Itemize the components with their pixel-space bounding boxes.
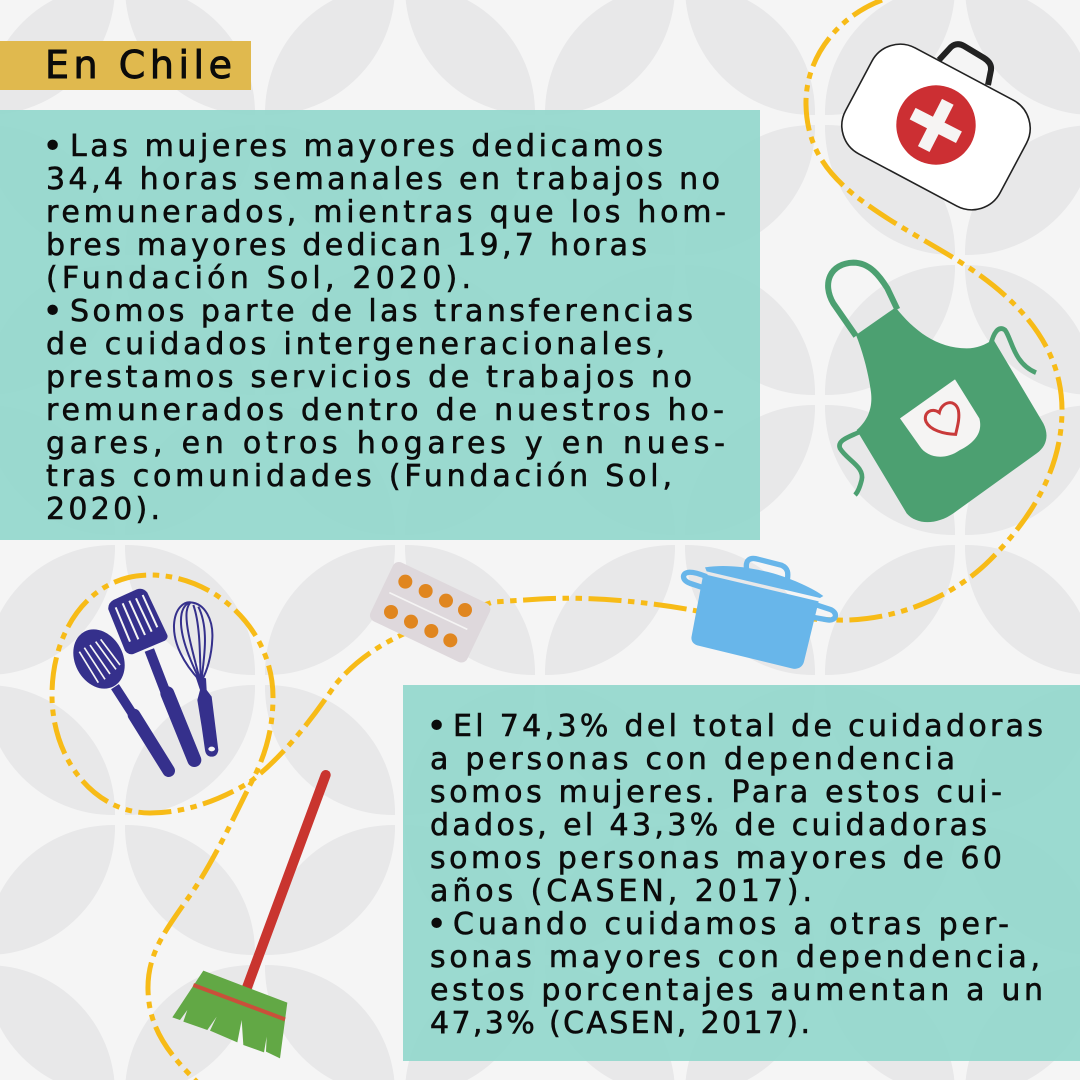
panel: lower text: somos mujeres. Para estos cui-	[430, 775, 1002, 810]
panel: upper text: bres mayores dedican 19,7 horas	[46, 228, 647, 263]
panel: lower text	[403, 685, 1080, 1061]
panel: upper text: •	[42, 126, 63, 167]
panel: lower text: •	[426, 706, 447, 747]
icon: cooking pot	[684, 558, 835, 669]
icon: apron	[828, 263, 1047, 522]
panel: upper text	[0, 110, 760, 540]
icon: whisk	[174, 602, 218, 757]
panel: upper text: (Fundación Sol, 2020).	[46, 261, 471, 296]
panel: lower text: •	[426, 904, 447, 945]
icon: kitchen utensils	[63, 589, 218, 771]
panel: upper text: •	[42, 291, 63, 332]
panel: lower text: años (CASEN, 2017).	[430, 874, 812, 909]
panel: upper text: de cuidados intergeneracionales,	[46, 327, 665, 362]
icon: slotted spoon	[63, 620, 169, 771]
panel: lower text: a personas con dependencia	[430, 742, 955, 777]
panel: upper text: 34,4 horas semanales en trabajos no	[46, 162, 720, 197]
panel: upper text: remunerados, mientras que los hom-	[46, 195, 726, 230]
panel: upper text: prestamos servicios de trabajos no	[46, 360, 692, 395]
panel: upper text: tras comunidades (Fundación Sol,	[46, 459, 672, 494]
panel: lower text: Cuando cuidamos a otras per-	[453, 907, 1009, 942]
panel: lower text: somos personas mayores de 60	[430, 841, 1002, 876]
panel: upper text: 2020).	[46, 492, 160, 527]
heading: En Chile: En Chile	[45, 43, 232, 87]
panel: lower text: sonas mayores con dependencia,	[430, 940, 1040, 975]
icon: pill blister pack	[368, 560, 493, 665]
panel: upper text: Somos parte de las transferencias	[70, 294, 693, 329]
icon: slotted spatula	[108, 589, 194, 760]
heading: En Chile	[0, 41, 251, 90]
panel: upper text: Las mujeres mayores dedicamos	[70, 129, 663, 164]
panel: lower text: 47,3% (CASEN, 2017).	[430, 1006, 810, 1041]
panel: upper text: remunerados dentro de nuestros ho-	[46, 393, 724, 428]
panel: upper text: gares, en otros hogares y en nues-	[46, 426, 725, 461]
panel: lower text: estos porcentajes aumentan a un	[430, 973, 1043, 1008]
icon: broom	[172, 775, 326, 1058]
icon: first aid kit	[831, 33, 1041, 221]
panel: lower text: dados, el 43,3% de cuidadoras	[430, 808, 987, 843]
panel: lower text: El 74,3% del total de cuidadoras	[453, 709, 1043, 744]
